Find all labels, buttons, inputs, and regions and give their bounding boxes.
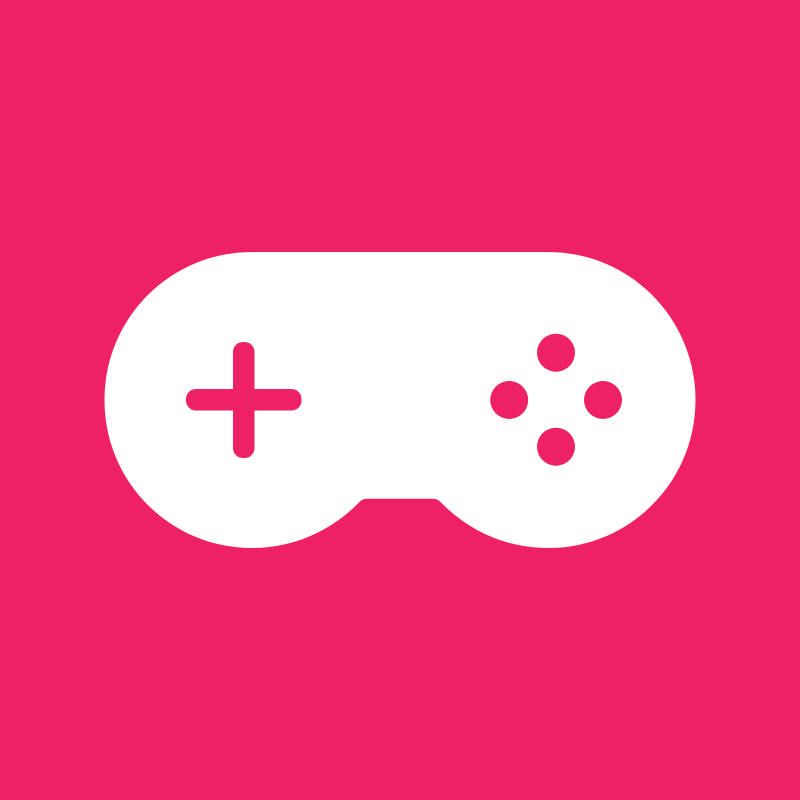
controller body xyxy=(104,252,696,548)
d-pad xyxy=(186,342,302,458)
action buttons xyxy=(490,334,622,466)
